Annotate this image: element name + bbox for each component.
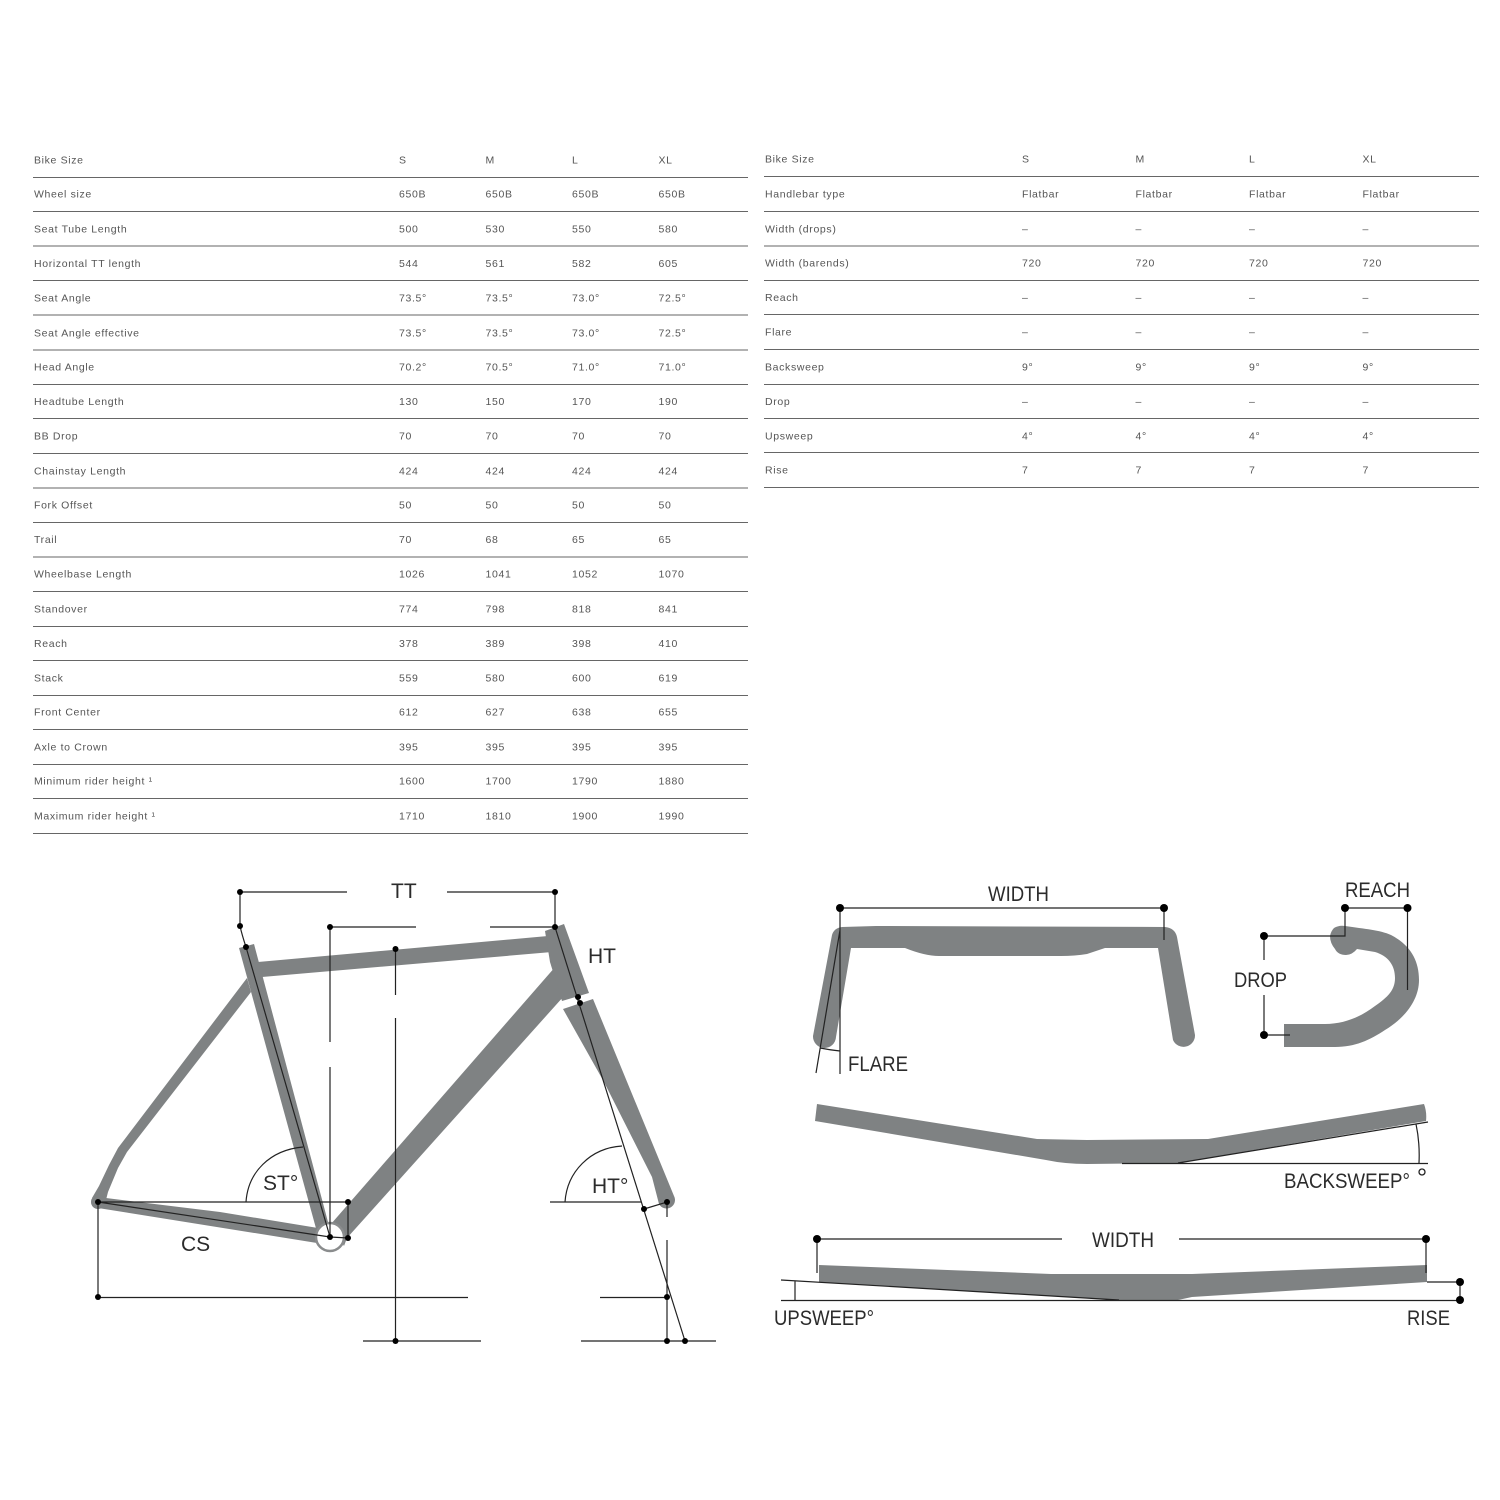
table row: Minimum rider height: 1600 [399,776,425,788]
table row: Bike Size: L [1249,154,1256,166]
table row: Rise: 7 [1362,464,1369,476]
table row: Drop: – [1022,396,1028,408]
table row: Maximum rider height: 1710 [399,810,425,822]
table row: Headtube Length: 150 [486,396,505,408]
label: REACH: REACH [1345,879,1410,902]
table row: Width (drops): – [1249,224,1256,236]
table row: Bike Size: S [1022,154,1030,166]
diagram: handlebar rear view with width, upsweep and rise [774,1229,1464,1330]
table row: Stack: 559 [399,672,418,684]
table row: Bike Size [33,154,748,178]
table row: Drop: Drop [765,396,790,408]
table row: Reach: 389 [486,638,505,650]
table row: Stack: 619 [658,672,678,684]
dimension dots [836,904,1168,912]
table row: Rise: 7 [1022,464,1028,476]
label: CS: CS [181,1233,210,1256]
table row: Upsweep: 4° [1022,430,1033,442]
table row: Trail [33,534,748,557]
table row: Chainstay Length [33,466,748,488]
table row: Reach: Reach [34,638,68,650]
table row: Reach: 398 [572,638,591,650]
table row: Stack: 580 [486,672,505,684]
table row: Width (barends): Width (barends) [765,258,849,270]
table row: Upsweep: 4° [1136,430,1147,442]
table row: Rise: 7 [1136,464,1142,476]
label: HT angle: HT° [592,1175,628,1198]
table row: Width (barends): 720 [1249,258,1268,270]
table row: Seat Angle: 72.5° [658,292,686,304]
table row: Headtube Length [33,396,748,418]
table row: Backsweep: 9° [1022,362,1033,374]
table row: Handlebar type: Handlebar type [765,188,845,200]
table row: Reach: – [1136,292,1142,304]
table row: Rise: Rise [765,464,789,476]
table row: Rise: 7 [1249,464,1256,476]
frame silhouette [91,924,675,1251]
table row: Wheelbase Length: 1052 [572,568,598,580]
table row: Seat Tube Length: 580 [658,224,678,236]
dimension lines [1264,908,1408,1035]
table row: Upsweep [764,430,1479,452]
table row: Maximum rider height [33,810,748,834]
dimension lines [1122,1122,1428,1164]
table row: Standover: 818 [572,604,591,616]
table row: Seat Tube Length: 530 [486,224,505,236]
table row: Reach: 410 [658,638,678,650]
table row: BB Drop: 70 [572,430,585,442]
table row: BB Drop: BB Drop [34,430,78,442]
table row: Minimum rider height [33,776,748,798]
table row: Bike Size: XL [658,154,673,166]
table row: Reach: Reach [765,292,799,304]
label: TT: TT [391,880,417,903]
table row: Bike Size [764,154,1479,176]
table row: Seat Tube Length [33,224,748,246]
table row: Axle to Crown: 395 [658,742,678,754]
table row: Head Angle: 71.0° [572,362,600,374]
panel: handlebar geometry table [764,154,1479,488]
handlebar silhouette [813,926,1195,1048]
table row: Standover: Standover [34,604,88,616]
table row: Bike Size: M [486,154,495,166]
table row: Fork Offset: 50 [486,500,498,512]
table row: Seat Angle: 73.5° [486,292,513,304]
table row: Flare [764,326,1479,350]
table row: Axle to Crown [33,742,748,764]
table row: Bike Size: Bike Size [34,154,84,166]
table row: Axle to Crown: 395 [399,742,418,754]
table row: Minimum rider height: 1790 [572,776,598,788]
table row: Wheel size: 650B [486,188,513,200]
dimension dots [813,1235,1464,1304]
table row: Maximum rider height: 1900 [572,810,598,822]
table row: Headtube Length: 190 [658,396,678,408]
table row: Wheel size [33,188,748,212]
dimension lines [816,908,1164,1074]
dimension lines [781,1239,1460,1300]
table row: BB Drop: 70 [486,430,498,442]
table row: Seat Angle effective: 73.0° [572,328,600,340]
table row: Backsweep: 9° [1362,362,1374,374]
table row: Trail: 65 [658,534,671,546]
diagram: handlebar side view with reach and drop [1234,879,1419,1047]
table row: Fork Offset: Fork Offset [34,500,93,512]
label: BACKSWEEP: BACKSWEEP° [1284,1170,1410,1193]
table row: Trail: 68 [486,534,498,546]
table row: Wheelbase Length: 1026 [399,568,425,580]
table row: Seat Angle: 73.5° [399,292,427,304]
table row: Headtube Length: 170 [572,396,591,408]
measurement dots [95,889,688,1344]
table row: Drop: – [1249,396,1256,408]
table row: Seat Angle effective [33,328,748,350]
table row: Fork Offset: 50 [658,500,671,512]
table row: Width (barends): 720 [1362,258,1382,270]
dimension dots [1260,904,1412,1039]
label: FLARE: FLARE [848,1053,908,1076]
table row: Head Angle: 70.2° [399,362,427,374]
label: WIDTH: WIDTH [988,883,1049,906]
table row: Horizontal TT length: 561 [486,258,505,270]
table row: Reach: – [1249,292,1256,304]
table row: Wheel size: 650B [399,188,426,200]
table row: Flare: – [1022,326,1028,338]
table row: Width (barends) [764,258,1479,280]
table row: Minimum rider height: 1700 [486,776,511,788]
table row: Axle to Crown: Axle to Crown [34,742,108,754]
table row: Chainstay Length: 424 [572,466,591,478]
table row: Trail: 70 [399,534,412,546]
table row: Standover: 841 [658,604,678,616]
table row: Backsweep: Backsweep [765,362,825,374]
table row: Wheelbase Length: 1041 [486,568,511,580]
degree mark [1419,1169,1425,1175]
table row: Drop: – [1136,396,1142,408]
side profile silhouette [1284,926,1419,1047]
table row: Width (barends): 720 [1022,258,1041,270]
table row: Backsweep: 9° [1136,362,1147,374]
table row: Seat Angle effective: 72.5° [658,328,686,340]
table row: Seat Angle [33,292,748,315]
table row: Flare: Flare [765,326,792,338]
table row: Wheel size: 650B [572,188,599,200]
table row: Wheel size: 650B [658,188,686,200]
table row: Backsweep: 9° [1249,362,1260,374]
table row: Seat Angle effective: Seat Angle effective [34,328,140,340]
table row: Standover [33,604,748,626]
label: RISE: RISE [1407,1307,1450,1330]
label: UPSWEEP: UPSWEEP° [774,1307,874,1330]
table row: Width (drops): – [1022,224,1028,236]
table row: Seat Angle: 73.0° [572,292,600,304]
table row: Width (drops): – [1362,224,1369,236]
table row: Handlebar type: Flatbar [1136,188,1173,200]
table row: Headtube Length: Headtube Length [34,396,124,408]
table row: Width (barends): 720 [1136,258,1155,270]
table row: Bike Size: XL [1362,154,1377,166]
table row: Width (drops) [764,224,1479,246]
table row: Front Center: 612 [399,706,418,718]
table row: Maximum rider height: 1990 [658,810,684,822]
label: DROP: DROP [1234,969,1287,992]
table row: Stack: 600 [572,672,591,684]
table row: Head Angle: Head Angle [34,362,95,374]
table row: Axle to Crown: 395 [572,742,591,754]
table row: Rise [764,464,1479,488]
table row: Seat Tube Length: 500 [399,224,418,236]
table row: Reach [33,638,748,660]
table row: Width (drops): Width (drops) [765,224,836,236]
table row: Stack: Stack [34,672,64,684]
table row: Head Angle: 71.0° [658,362,686,374]
table row: Width (drops): – [1136,224,1142,236]
top view silhouette [815,1104,1426,1164]
table row: Axle to Crown: 395 [486,742,505,754]
table row: Front Center [33,706,748,730]
table row: Front Center: 627 [486,706,505,718]
table row: Chainstay Length: 424 [486,466,505,478]
table row: Reach: – [1022,292,1028,304]
table row: Stack [33,672,748,696]
table row: Upsweep: 4° [1249,430,1260,442]
table row: Bike Size: L [572,154,578,166]
table row: Flare: – [1249,326,1256,338]
table row: Seat Tube Length: 550 [572,224,591,236]
table row: Wheelbase Length: 1070 [658,568,684,580]
label: WIDTH: WIDTH [1092,1229,1154,1252]
table row: Drop: – [1362,396,1369,408]
table row: Minimum rider height: Minimum rider height ¹ [34,776,153,788]
table row: Head Angle [33,362,748,384]
table row: Maximum rider height: 1810 [486,810,511,822]
table row: Trail: 65 [572,534,585,546]
table row: Horizontal TT length: 544 [399,258,418,270]
table row: Front Center: 638 [572,706,591,718]
table row: Seat Angle effective: 73.5° [399,328,427,340]
table row: BB Drop: 70 [658,430,671,442]
table row: Reach [764,292,1479,314]
panel: frame geometry table [33,154,748,834]
table row: Flare: – [1136,326,1142,338]
table row: BB Drop: 70 [399,430,412,442]
table row: Chainstay Length: Chainstay Length [34,466,126,478]
table row: Minimum rider height: 1880 [658,776,684,788]
diagram: bike frame geometry [91,880,716,1344]
table row: Fork Offset [33,500,748,522]
table row: Fork Offset: 50 [572,500,585,512]
table row: Reach: 378 [399,638,418,650]
table row: Handlebar type: Flatbar [1249,188,1286,200]
table row: Upsweep: Upsweep [765,430,813,442]
table row: Upsweep: 4° [1362,430,1374,442]
diagram: handlebar front view with width and flare [813,883,1195,1076]
table row: Seat Angle: Seat Angle [34,292,91,304]
table row: Standover: 798 [486,604,505,616]
table row: Seat Angle effective: 73.5° [486,328,513,340]
table row: Chainstay Length: 424 [399,466,418,478]
label: ST angle: ST° [263,1172,298,1195]
table row: Bike Size: Bike Size [765,154,815,166]
table row: Seat Tube Length: Seat Tube Length [34,224,127,236]
table row: Wheel size: Wheel size [34,188,92,200]
table row: Headtube Length: 130 [399,396,418,408]
table row: Bike Size: M [1136,154,1145,166]
table row: Front Center: 655 [658,706,678,718]
table row: Drop [764,396,1479,418]
table row: Handlebar type: Flatbar [1022,188,1059,200]
table row: Trail: Trail [34,534,57,546]
table row: Fork Offset: 50 [399,500,412,512]
dimension lines [98,892,716,1341]
table row: Backsweep [764,362,1479,384]
table row: Chainstay Length: 424 [658,466,678,478]
table row: Front Center: Front Center [34,706,101,718]
label: HT: HT [588,945,616,968]
table row: Horizontal TT length: 582 [572,258,591,270]
table row: BB Drop [33,430,748,454]
table row: Head Angle: 70.5° [486,362,513,374]
table row: Horizontal TT length [33,258,748,280]
table row: Reach: – [1362,292,1369,304]
table row: Bike Size: S [399,154,407,166]
table row: Wheelbase Length [33,568,748,592]
table row: Wheelbase Length: Wheelbase Length [34,568,132,580]
table row: Flare: – [1362,326,1369,338]
table row: Horizontal TT length: 605 [658,258,678,270]
table row: Maximum rider height: Maximum rider height ¹ [34,810,156,822]
table row: Horizontal TT length: Horizontal TT length [34,258,141,270]
table row: Handlebar type: Flatbar [1362,188,1400,200]
diagram: handlebar top view with backsweep [815,1104,1428,1193]
rear view silhouette [819,1265,1427,1300]
table row: Handlebar type [764,188,1479,212]
table row: Standover: 774 [399,604,418,616]
